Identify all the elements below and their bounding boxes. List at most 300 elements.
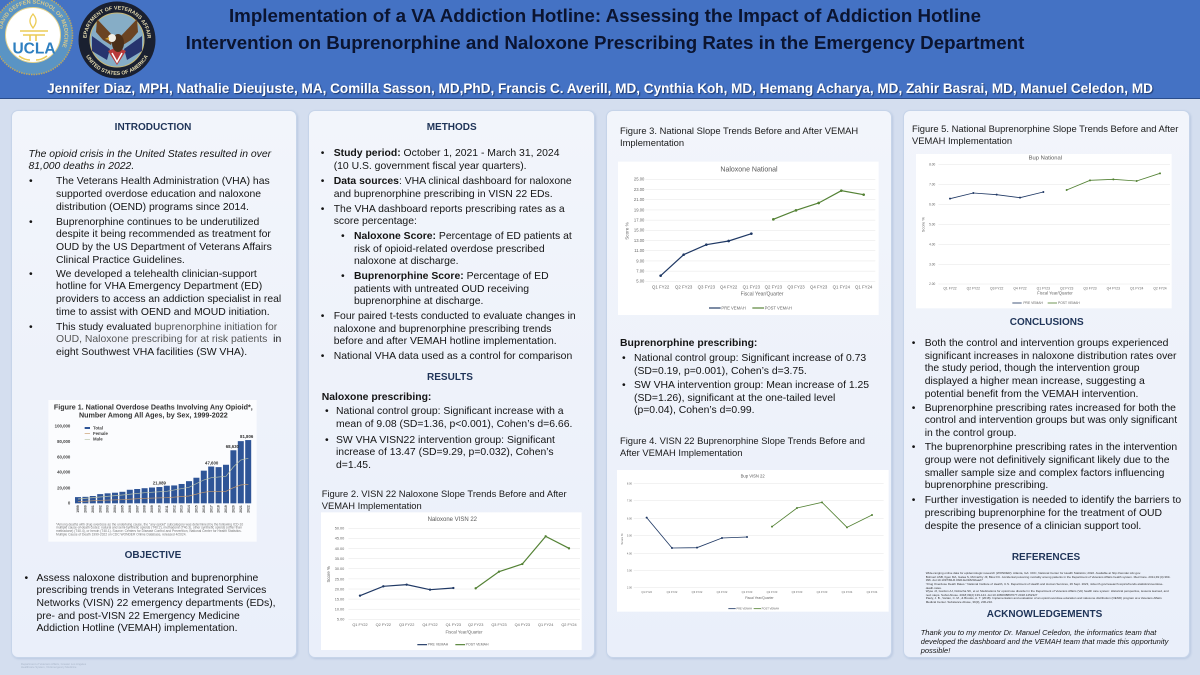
sub-bullet: naloxone score: Naloxone Score: Percentage of ED patients at xyxy=(354,231,572,242)
chart: figure 4 buprenorphine VISN 22: Q1 FY23 xyxy=(742,590,753,594)
chart: figure 3 naloxone national: Fiscal Year/Quarter xyxy=(741,292,784,298)
bullet: national buprenorphine result: (SD=0.19, p=0.001), Cohen’s d=3.75. xyxy=(634,366,807,377)
bullet: VISN22 naloxone result: SW VHA VISN22 intervention group: Significant xyxy=(336,435,555,446)
panel: conclusions, references, acknowledgements: • xyxy=(912,338,915,349)
footer fine print: Healthcare System, VA Emergency Medicine xyxy=(21,665,76,669)
caption: figure 3 xyxy=(620,125,858,148)
sub-bullet: buprenorphine score xyxy=(341,271,549,307)
subheading: naloxone prescribing: Naloxone prescribing: xyxy=(322,392,431,403)
chart: figure 3 naloxone national: 7.00 xyxy=(636,268,645,273)
bullet: objective: Addiction Hotline (VEMAH) implementation. xyxy=(36,623,237,634)
chart: figure 4 buprenorphine VISN 22: 2.00 xyxy=(627,586,633,590)
text: acknowledgements: possible! xyxy=(921,646,950,655)
chart: figure 4 buprenorphine VISN 22: PRE VEMAH xyxy=(736,606,752,610)
chart: figure 2 naloxone VISN 22: Q1 FY24 xyxy=(538,623,554,627)
heading: acknowledgements: ACKNOWLEDGEMENTS xyxy=(987,609,1102,620)
chart: figure 3 naloxone national: Q2 FY23 xyxy=(765,284,783,289)
bullet: telehealth hotline: We developed a telehealth clinician-support xyxy=(56,269,257,280)
title: Implementation of a VA Addiction Hotline: Assessing the Impact of Addiction Hotline xyxy=(229,5,981,26)
y axis labels xyxy=(55,423,71,506)
chart: figure 3 naloxone national: Q4 FY23 xyxy=(810,284,828,289)
bullet: study aim: eight Southwest VHA facilities (SW VHA). xyxy=(56,347,247,358)
y axis labels: 20,000 xyxy=(57,485,71,490)
chart: figure 5 buprenorphine national: Q1 FY22 xyxy=(943,286,957,290)
panel: introduction and objective: • xyxy=(29,269,33,280)
bullet: naloxone conclusion: displayed a higher mean increase, suggesting a xyxy=(925,376,1145,387)
chart: figure 5 buprenorphine national: 3.00 xyxy=(929,262,936,266)
heading: introduction: INTRODUCTION xyxy=(115,122,191,132)
bars: total deaths xyxy=(75,440,251,503)
panel: methods and results xyxy=(308,110,595,658)
heading: methods: METHODS xyxy=(427,122,477,133)
chart: figure 4 buprenorphine VISN 22: Q2 FY23 xyxy=(767,590,778,594)
chart: figure 4 buprenorphine VISN 22: Q1 FY22 xyxy=(641,590,652,594)
bullet: VISN22 naloxone result: d=1.45. xyxy=(336,460,371,471)
reference list: 396. doi:10.1097/MLR.0b013e318202aa27 xyxy=(926,578,983,582)
chart: figure 2 naloxone VISN 22: 5.00 xyxy=(337,618,344,622)
text: opening statement: The opioid crisis in the United States resulted in over xyxy=(28,149,271,160)
chart: figure 4 buprenorphine VISN 22: POST VEMAH xyxy=(762,606,779,610)
bullet: objective xyxy=(24,572,276,634)
bullet: intervention significance: The buprenorphine prescribing rates in the intervention xyxy=(925,442,1177,453)
bullet: national buprenorphine result xyxy=(622,353,866,377)
panel: conclusions, references, acknowledgements xyxy=(903,110,1190,658)
chart: figure 5 buprenorphine national: Fiscal Year/Quarter xyxy=(1037,291,1073,296)
y axis labels: 60,000 xyxy=(57,454,71,459)
chart: figure 3 naloxone national: POST VEMAH xyxy=(765,305,792,310)
panel: methods and results: • xyxy=(341,231,345,242)
chart: figure 3 naloxone national: Q3 FY23 xyxy=(787,284,805,289)
bullet: national naloxone result xyxy=(325,406,572,430)
chart: figure 4 buprenorphine VISN 22: Q3 FY23 xyxy=(792,590,803,594)
chart: figure 4 buprenorphine VISN 22: Q1 FY24 xyxy=(842,590,853,594)
chart: figure 4 buprenorphine VISN 22: Q2 FY22 xyxy=(667,590,678,594)
chart footnote: Multiple Cause of Death 1999-2022 on CDC WONDER Online Database, released 4/2024. xyxy=(56,532,187,536)
chart: figure 4 buprenorphine VISN 22: 8.00 xyxy=(627,481,633,485)
chart: figure 2 naloxone VISN 22: 30.00 xyxy=(335,567,344,571)
bullet: study aim xyxy=(29,322,281,358)
data labels xyxy=(153,434,254,486)
chart: figure 2 naloxone VISN 22: 20.00 xyxy=(335,587,344,591)
chart: figure 3 naloxone national: 23.00 xyxy=(634,187,645,192)
panel: introduction and objective: • xyxy=(29,176,33,187)
chart: figure 4 buprenorphine VISN 22: 4.00 xyxy=(627,551,633,555)
year labels: 2014 xyxy=(187,505,191,513)
year labels: 2001 xyxy=(91,505,95,513)
chart: figure 2 naloxone VISN 22: Q1 FY22 xyxy=(352,623,368,627)
chart: figure 5 buprenorphine national: Q4 FY22 xyxy=(1013,286,1027,290)
chart: figure 5 buprenorphine national: Score % xyxy=(920,217,925,232)
logo: UCLA David Geffen School of Medicine seal xyxy=(0,0,74,76)
heading: conclusions: CONCLUSIONS xyxy=(1010,317,1084,328)
year labels: 2021 xyxy=(239,505,243,513)
panel: methods and results: • xyxy=(325,406,329,417)
chart: figure 5 buprenorphine national: Q3 FY22 xyxy=(990,286,1003,290)
chart: figure 5 buprenorphine national: Q3 FY23 xyxy=(1083,286,1097,290)
chart: figure 2 naloxone VISN 22: 45.00 xyxy=(335,537,344,541)
chart footnote: multiple cause-of-death codes: natural and semi-synthetic opioids (T40.2), methadone (T40.3), other synthetic opioids (other than xyxy=(56,526,242,530)
chart: figure 2 naloxone VISN 22: 25.00 xyxy=(335,577,344,581)
chart: figure 5 buprenorphine national xyxy=(916,154,1172,308)
bullet: further investigation: prescribing buprenorphine for the treatment of OUD xyxy=(925,508,1162,519)
bullet: national naloxone result: mean of 9.08 (SD=1.36, p<0.001), Cohen’s d=6.66. xyxy=(336,419,572,430)
bullet: buprenorphine conclusion: in the control group. xyxy=(925,428,1017,439)
panel: methods and results: • xyxy=(341,271,345,282)
bullet: objective: prescribing trends in Veterans Integrated Services xyxy=(36,585,266,596)
chart: figure 3 naloxone national: 11.00 xyxy=(634,248,645,253)
year labels: 2005 xyxy=(120,505,124,513)
bullet: intervention significance: buprenorphine prescribing. xyxy=(925,480,1048,491)
year labels: 2007 xyxy=(135,505,139,513)
caption: figure 2: VEMAH Implementation xyxy=(322,500,422,511)
year labels: 2020 xyxy=(231,505,235,513)
chart: figure 5 buprenorphine national: 5.00 xyxy=(929,223,936,227)
chart: figure 5 buprenorphine national: 7.00 xyxy=(929,183,936,187)
chart: figure 2 naloxone VISN 22: 10.00 xyxy=(335,608,344,612)
year labels: 2004 xyxy=(113,505,117,513)
chart: figure 2 naloxone VISN 22: Q4 FY22 xyxy=(422,623,438,627)
chart: figure 2 naloxone VISN 22: Q3 FY22 xyxy=(399,623,414,627)
bullet: dashboard: The VHA dashboard reports prescribing rates as a xyxy=(334,204,565,215)
caption: figure 5 xyxy=(912,123,1178,146)
bullet: t-tests: naloxone and buprenorphine prescribing trends xyxy=(334,324,551,335)
bullet: VISN22 naloxone result: increase of 13.47 (SD=9.29, p=0.032), Cohen’s xyxy=(336,447,554,458)
reference list: death-rates. xyxy=(926,586,942,590)
reference list: Pauly, J. B., Vartan, C. M., & Brooks, A. T. (2018). Implementation and evaluation of an opioid overdose education and naloxone distribution (OEND) program at a Veterans Affairs xyxy=(926,596,1162,600)
caption: figure 4: After VEMAH Implementation xyxy=(620,447,742,458)
chart: figure 4 buprenorphine VISN 22 xyxy=(617,470,888,612)
chart: figure 4 buprenorphine VISN 22: Bup VISN 22 xyxy=(741,473,765,478)
caption: figure 3: Implementation xyxy=(620,137,684,148)
year labels: 2013 xyxy=(180,505,184,513)
chart: figure 4 buprenorphine VISN 22: Q4 FY23 xyxy=(817,590,828,594)
bullet: national buprenorphine result: National control group: Significant increase of 0.73 xyxy=(634,353,866,364)
year labels: 2022 xyxy=(246,505,250,513)
chart: figure 2 naloxone VISN 22: 15.00 xyxy=(335,597,344,601)
bullet: SW VHA buprenorphine result: SW VHA intervention group: Mean increase of 1.25 xyxy=(634,380,869,391)
bullet: SW VHA buprenorphine result: (SD=1.26), significant at the one-tailed level xyxy=(634,393,835,404)
reference list: next steps. Subst Abuse. 2018;39(2):139-144. doi:10.1080/08897077.2018.1452327 xyxy=(926,593,1037,597)
footer fine print xyxy=(21,662,86,669)
chart: figure 5 buprenorphine national: Q2 FY22 xyxy=(967,286,980,290)
heading: objective: OBJECTIVE xyxy=(125,550,181,560)
bullet: naloxone conclusion: the study period, though the intervention group xyxy=(925,363,1140,374)
caption: figure 4: Figure 4. VISN 22 Buprenorphine Slope Trends Before and xyxy=(620,435,865,446)
panel: methods and results: • xyxy=(321,148,324,159)
sub-bullet: naloxone score: risk of opioid-related overdose prescribed xyxy=(354,244,545,255)
bullet: naloxone conclusion xyxy=(912,338,1177,400)
bullet: naloxone conclusion: Both the control and intervention groups experienced xyxy=(925,338,1168,349)
bullet: study period: Study period: October 1, 2021 - March 31, 2024 xyxy=(334,148,560,159)
chart: figure 2 naloxone VISN 22: 50.00 xyxy=(335,527,344,531)
chart: figure 2 naloxone VISN 22: Q2 FY24 xyxy=(561,623,578,627)
chart: figure 2 naloxone VISN 22 xyxy=(321,512,582,650)
chart footnote: *Among deaths with drug overdose as the underlying cause, the "any opioid" subcategory was determined by the following ICD-10 xyxy=(56,522,243,526)
chart: figure 4 buprenorphine VISN 22: 3.00 xyxy=(627,568,633,572)
chart: figure 2 naloxone VISN 22: Fiscal Year/Quarter xyxy=(445,629,483,634)
chart title xyxy=(54,403,253,420)
chart: figure 4 buprenorphine VISN 22: Q2 FY24 xyxy=(867,590,878,594)
bullet: VHA OEND: supported overdose education and naloxone xyxy=(56,189,261,200)
panel: methods and results: • xyxy=(325,435,329,446)
panel: methods and results: • xyxy=(321,311,324,322)
bullet: t-tests xyxy=(321,311,576,347)
year labels: 2012 xyxy=(172,505,176,513)
chart: figure 2 naloxone VISN 22: Q1 FY23 xyxy=(446,623,461,627)
bullet: objective: Assess naloxone distribution and buprenorphine xyxy=(36,572,258,584)
chart: figure 3 naloxone national: Q4 FY22 xyxy=(720,284,738,289)
bullet: buprenorphine underutilized: Clinical Practice Guidelines. xyxy=(56,255,185,266)
bullet: dashboard: score percentage: xyxy=(334,216,417,227)
bullet: VHA OEND xyxy=(29,176,270,213)
year labels: 2011 xyxy=(165,505,169,513)
chart: figure 4 buprenorphine VISN 22: 7.00 xyxy=(627,499,633,503)
year labels: 2016 xyxy=(202,505,206,513)
chart: figure 3 naloxone national: 21.00 xyxy=(634,197,645,202)
reference list: Wide-ranging online data for epidemiologic research (WONDER). Atlanta, GA: CDC, National Center for Health Statistics; 2022. Available at http://wonder.cdc.gov. xyxy=(926,571,1141,575)
panel: figures and buprenorphine results: • xyxy=(622,380,626,391)
bullet: telehealth hotline xyxy=(29,269,281,318)
chart: figure 4 buprenorphine VISN 22: Q3 FY22 xyxy=(692,590,703,594)
bullet: buprenorphine conclusion xyxy=(912,403,1178,439)
year labels: 2009 xyxy=(150,505,154,513)
chart: figure 4 buprenorphine VISN 22: 5.00 xyxy=(627,534,633,538)
y axis labels: 100,000 xyxy=(55,423,71,428)
caption: figure 5: Figure 5. National Buprenorphine Slope Trends Before and After xyxy=(912,123,1178,134)
chart: figure 3 naloxone national: 13.00 xyxy=(634,238,645,243)
bullet: naloxone conclusion: potential benefit from the VEMAH intervention. xyxy=(925,389,1138,400)
chart: figure 2 naloxone VISN 22: Score % xyxy=(326,566,331,583)
panel: introduction and objective xyxy=(11,110,297,658)
reference list: “Drug Overdose Death Rates.” National Institute of Health, U.S. Department of Health and Human Services, 26 Sept. 2023, nida.nih.gov/research-topics/trends-statistics/overdose- xyxy=(926,582,1163,586)
chart: figure 3 naloxone national xyxy=(618,162,878,315)
heading: results: RESULTS xyxy=(427,372,473,383)
lines: male and female deaths xyxy=(78,458,248,502)
sub-bullet: naloxone score: naloxone at discharge. xyxy=(354,256,459,267)
bullet: t-tests: Four paired t-tests conducted to evaluate changes in xyxy=(334,311,576,322)
title second line: Intervention on Buprenorphine and Naloxone Prescribing Rates in the Emergency Department xyxy=(186,32,1024,53)
chart: figure 1 overdose deaths xyxy=(48,400,256,542)
chart: figure 3 naloxone national: Score % xyxy=(625,222,630,240)
chart: figure 3 naloxone national: Q1 FY23 xyxy=(743,284,761,289)
bullet: SW VHA buprenorphine result: (p=0.04), Cohen’s d=0.99. xyxy=(634,405,755,416)
chart: figure 2 naloxone VISN 22: Naloxone VISN 22 xyxy=(428,517,478,523)
chart: figure 2 naloxone VISN 22: Q4 FY23 xyxy=(515,623,530,627)
panel: methods and results: • xyxy=(321,204,324,215)
chart: figure 3 naloxone national: 15.00 xyxy=(634,228,645,233)
chart: figure 4 buprenorphine VISN 22: Score % xyxy=(620,533,624,545)
chart: figure 4 buprenorphine VISN 22: Fiscal Year/Quarter xyxy=(745,596,774,600)
panel: figures and buprenorphine results: • xyxy=(622,353,626,364)
caption: figure 4 xyxy=(620,435,865,458)
bullet: SW VHA buprenorphine result xyxy=(622,380,869,416)
reference list: Bohnert ASB, Ilgen MA, Galea S, McCarthy JF, Blow FC. Accidental poisoning mortality among patients in the Department of Veterans Affairs health system. Med Care. 2011;49:(4):393- xyxy=(926,575,1170,579)
year labels: 2000 xyxy=(83,505,87,513)
data labels: 81,806 xyxy=(240,434,254,439)
reference list: Wyse JJ, Gordon AJ, Dobscha SK, et al. Medications for opioid use disorder in the Department of Veterans Affairs (VA) health care system: Historical perspective, lessons learned, and xyxy=(926,589,1169,593)
text: opening statement: 81,000 deaths in 2022. xyxy=(28,161,134,172)
chart: figure 3 naloxone national: 19.00 xyxy=(634,207,645,212)
year labels: 2017 xyxy=(209,505,213,513)
text: opening statement xyxy=(28,149,272,172)
chart: figure 5 buprenorphine national: Q1 FY24 xyxy=(1130,286,1143,290)
chart: figure 3 naloxone national: Q3 FY23 xyxy=(698,284,716,289)
authors: Jennifer Diaz, MPH, Nathalie Dieujuste, MA, Comilla Sasson, MD,PhD, Francis C. Averill, MD, Cynthia Koh, MD, Hemang Acharya, MD, Zahir Basrai, MD, Manuel Celedon, MD xyxy=(47,81,1153,96)
chart: figure 5 buprenorphine national: 2.00 xyxy=(929,282,936,286)
chart footnote xyxy=(56,522,243,536)
data labels: 47,600 xyxy=(205,460,219,465)
bullet: buprenorphine underutilized: Buprenorphine continues to be underutilized xyxy=(56,217,259,228)
caption: figure 3: Figure 3. National Slope Trends Before and After VEMAH xyxy=(620,125,858,136)
year labels: 2010 xyxy=(157,505,161,513)
chart: figure 5 buprenorphine national: POST VEMAH xyxy=(1058,301,1080,305)
year labels: 1999 xyxy=(76,505,80,513)
bullet: VHA OEND: The Veterans Health Administration (VHA) has xyxy=(56,176,270,187)
bullet: buprenorphine conclusion: Buprenorphine prescribing rates increased for both the xyxy=(925,403,1176,414)
chart: figure 5 buprenorphine national: Q4 FY23 xyxy=(1107,286,1120,290)
panel: methods and results: • xyxy=(321,176,324,187)
panel: conclusions, references, acknowledgements: • xyxy=(912,495,915,506)
bullet: national naloxone result: National control group: Significant increase with a xyxy=(336,406,564,417)
bullet: further investigation: despite the presence of a clinician support tool. xyxy=(925,521,1141,532)
bullet: data sources: Data sources: VHA clinical dashboard for naloxone xyxy=(334,176,572,187)
y axis labels: 0 xyxy=(68,501,71,506)
chart: figure 3 naloxone national: Q1 FY24 xyxy=(833,284,851,289)
year labels: 2002 xyxy=(98,505,102,513)
sub-bullet: naloxone score xyxy=(341,231,572,267)
year labels: 2006 xyxy=(128,505,132,513)
chart: figure 4 buprenorphine VISN 22: Q4 FY22 xyxy=(717,590,728,594)
chart: figure 5 buprenorphine national: 4.00 xyxy=(929,242,936,246)
chart: figure 5 buprenorphine national: Q2 FY24 xyxy=(1153,286,1167,290)
header banner xyxy=(0,0,1200,99)
data labels: 68,630 xyxy=(226,444,240,449)
panel: conclusions, references, acknowledgements: • xyxy=(912,442,915,453)
bullet: buprenorphine underutilized: despite it being recommended as treatment for xyxy=(56,229,271,240)
heading: references: REFERENCES xyxy=(1012,552,1080,563)
logo: Department of Veterans Affairs seal: UNITED STATES OF AMERICA xyxy=(86,54,148,76)
caption: figure 2 xyxy=(322,488,567,511)
chart: figure 3 naloxone national: PRE VEMAH xyxy=(721,305,746,310)
text: acknowledgements xyxy=(920,628,1169,655)
bullet: intervention significance: group were not definitively significant likely due to the xyxy=(925,455,1170,466)
bullet: further investigation: Further investigation is needed to identify the barriers to xyxy=(925,495,1181,506)
chart: figure 3 naloxone national: Naloxone National xyxy=(720,166,778,173)
chart: figure 3 naloxone national: Q2 FY23 xyxy=(675,284,693,289)
logo: Department of Veterans Affairs seal xyxy=(78,2,156,78)
reference list xyxy=(926,571,1170,604)
chart: figure 2 naloxone VISN 22: POST VEMAH xyxy=(466,643,489,647)
data labels: 21,089 xyxy=(153,481,167,486)
year labels: 2018 xyxy=(217,505,221,513)
chart: figure 4 buprenorphine VISN 22: 6.00 xyxy=(627,516,633,520)
bullet: telehealth hotline: time to assist with OEND and MOUD initiation. xyxy=(56,307,270,318)
panel: conclusions, references, acknowledgements: • xyxy=(912,403,915,414)
bullet: objective: Networks (VISN) 22 emergency departments (EDs), xyxy=(36,598,276,609)
chart: figure 3 naloxone national: Q1 FY22 xyxy=(652,284,670,289)
footer fine print: Department of Veterans Affairs, Greater Los Angeles xyxy=(21,662,86,666)
bullet: buprenorphine conclusion: control and intervention groups but was only significant xyxy=(925,415,1177,426)
legend: Female xyxy=(93,431,109,436)
legend: Total xyxy=(93,425,103,430)
year labels: 2003 xyxy=(106,505,110,513)
bullet: study period: (10 U.S. government fiscal year quarters). xyxy=(334,161,527,172)
chart: figure 3 naloxone national: 5.00 xyxy=(636,279,645,284)
panel: introduction and objective: • xyxy=(29,322,33,333)
bullet: buprenorphine underutilized: OUD by the US Department of Veterans Affairs xyxy=(56,242,272,253)
chart title: Figure 1. National Overdose Deaths Involving Any Opioid*, xyxy=(54,403,253,411)
bullet: intervention significance: smaller sample size and complex factors influencing xyxy=(925,468,1164,479)
legend xyxy=(85,425,109,442)
chart: figure 5 buprenorphine national: Bup National xyxy=(1029,156,1062,162)
text: acknowledgements: developed the dashboard and the VEMAH team that made this opportunity xyxy=(921,637,1168,646)
bullet: control: National VHA data used as a control for comparison xyxy=(334,351,572,362)
bullet: dashboard xyxy=(321,204,565,227)
chart: figure 3 naloxone national: Q1 FY24 xyxy=(855,284,873,289)
chart: figure 2 naloxone VISN 22: 35.00 xyxy=(335,557,344,561)
bullet: study aim: OUD, Naloxone prescribing for at risk patients in xyxy=(56,334,281,345)
chart: figure 3 naloxone national: 25.00 xyxy=(634,177,645,182)
bullet: VHA OEND: distribution (OEND) programs since 2014. xyxy=(56,202,249,213)
panel: introduction and objective: • xyxy=(29,217,33,228)
chart title: Number Among All Ages, by Sex, 1999-2022 xyxy=(79,412,228,420)
bullet: t-tests: before and after VEMAH hotline implementation. xyxy=(334,336,557,347)
chart: figure 2 naloxone VISN 22: 40.00 xyxy=(335,547,344,551)
bullet: VISN22 naloxone result xyxy=(325,435,555,471)
y axis labels: 40,000 xyxy=(57,470,71,475)
panel: methods and results: • xyxy=(321,351,324,362)
chart footnote: methadone) (T40.4), or heroin (T40.1). Source: Centers for Disease Control and Prevention, National Center for Health Statistics. xyxy=(56,529,242,533)
year labels: 2015 xyxy=(194,505,198,513)
reference list: Medical Center. Substance Abuse, 39(3), 206-210. xyxy=(926,600,993,604)
chart: figure 5 buprenorphine national: 8.00 xyxy=(929,163,936,167)
bullet: study aim: This study evaluated buprenorphine initiation for xyxy=(56,322,277,333)
chart: figure 5 buprenorphine national: PRE VEMAH xyxy=(1023,301,1044,305)
legend: Male xyxy=(93,437,103,442)
chart: figure 3 naloxone national: 17.00 xyxy=(634,217,645,222)
chart: figure 2 naloxone VISN 22: PRE VEMAH xyxy=(428,643,449,647)
bullet: intervention significance xyxy=(912,442,1177,491)
subheading: buprenorphine prescribing: Buprenorphine prescribing: xyxy=(620,338,757,349)
bullet: buprenorphine underutilized xyxy=(29,217,272,266)
chart: figure 3 naloxone national: 9.00 xyxy=(636,258,645,263)
chart: figure 5 buprenorphine national: 6.00 xyxy=(929,203,936,207)
y axis labels: 80,000 xyxy=(57,439,71,444)
chart: figure 5 buprenorphine national: Q2 FY23 xyxy=(1060,286,1073,290)
bullet: objective: pre- and post-VISN 22 Emergency Medicine xyxy=(36,611,240,622)
logo: UCLA David Geffen School of Medicine seal: UCLA xyxy=(12,40,56,58)
chart: figure 5 buprenorphine national: Q1 FY23 xyxy=(1037,286,1050,290)
year labels: 2019 xyxy=(224,505,228,513)
sub-bullet: buprenorphine score: patients with untreated OUD receiving xyxy=(354,284,529,295)
bullet: telehealth hotline: hotline for VHA Emergency Department (ED) xyxy=(56,281,262,292)
caption: figure 2: Figure 2. VISN 22 Naloxone Slope Trends Before and After xyxy=(322,488,567,499)
bullet: study period xyxy=(321,148,560,172)
panel: introduction and objective: • xyxy=(24,572,28,584)
chart: figure 2 naloxone VISN 22: Q2 FY22 xyxy=(376,623,391,627)
chart: figure 2 naloxone VISN 22: Q2 FY23 xyxy=(468,623,483,627)
bullet: further investigation xyxy=(912,495,1181,532)
sub-bullet: buprenorphine score: Buprenorphine Score: Percentage of ED xyxy=(354,271,549,282)
bullet: data sources: and buprenorphine prescribing in VISN 22 EDs. xyxy=(334,189,553,200)
bullet: telehealth hotline: providers to access an addiction specialist in real xyxy=(56,294,281,305)
year labels: 2008 xyxy=(143,505,147,513)
text: acknowledgements: Thank you to my mentor Dr. Manuel Celedon, the informatics team that xyxy=(921,628,1156,637)
chart: figure 2 naloxone VISN 22: Q3 FY23 xyxy=(491,623,507,627)
caption: figure 5: VEMAH Implementation xyxy=(912,135,1012,146)
panel: figures and buprenorphine results xyxy=(606,110,892,658)
sub-bullet: buprenorphine score: buprenorphine at discharge. xyxy=(354,296,483,307)
